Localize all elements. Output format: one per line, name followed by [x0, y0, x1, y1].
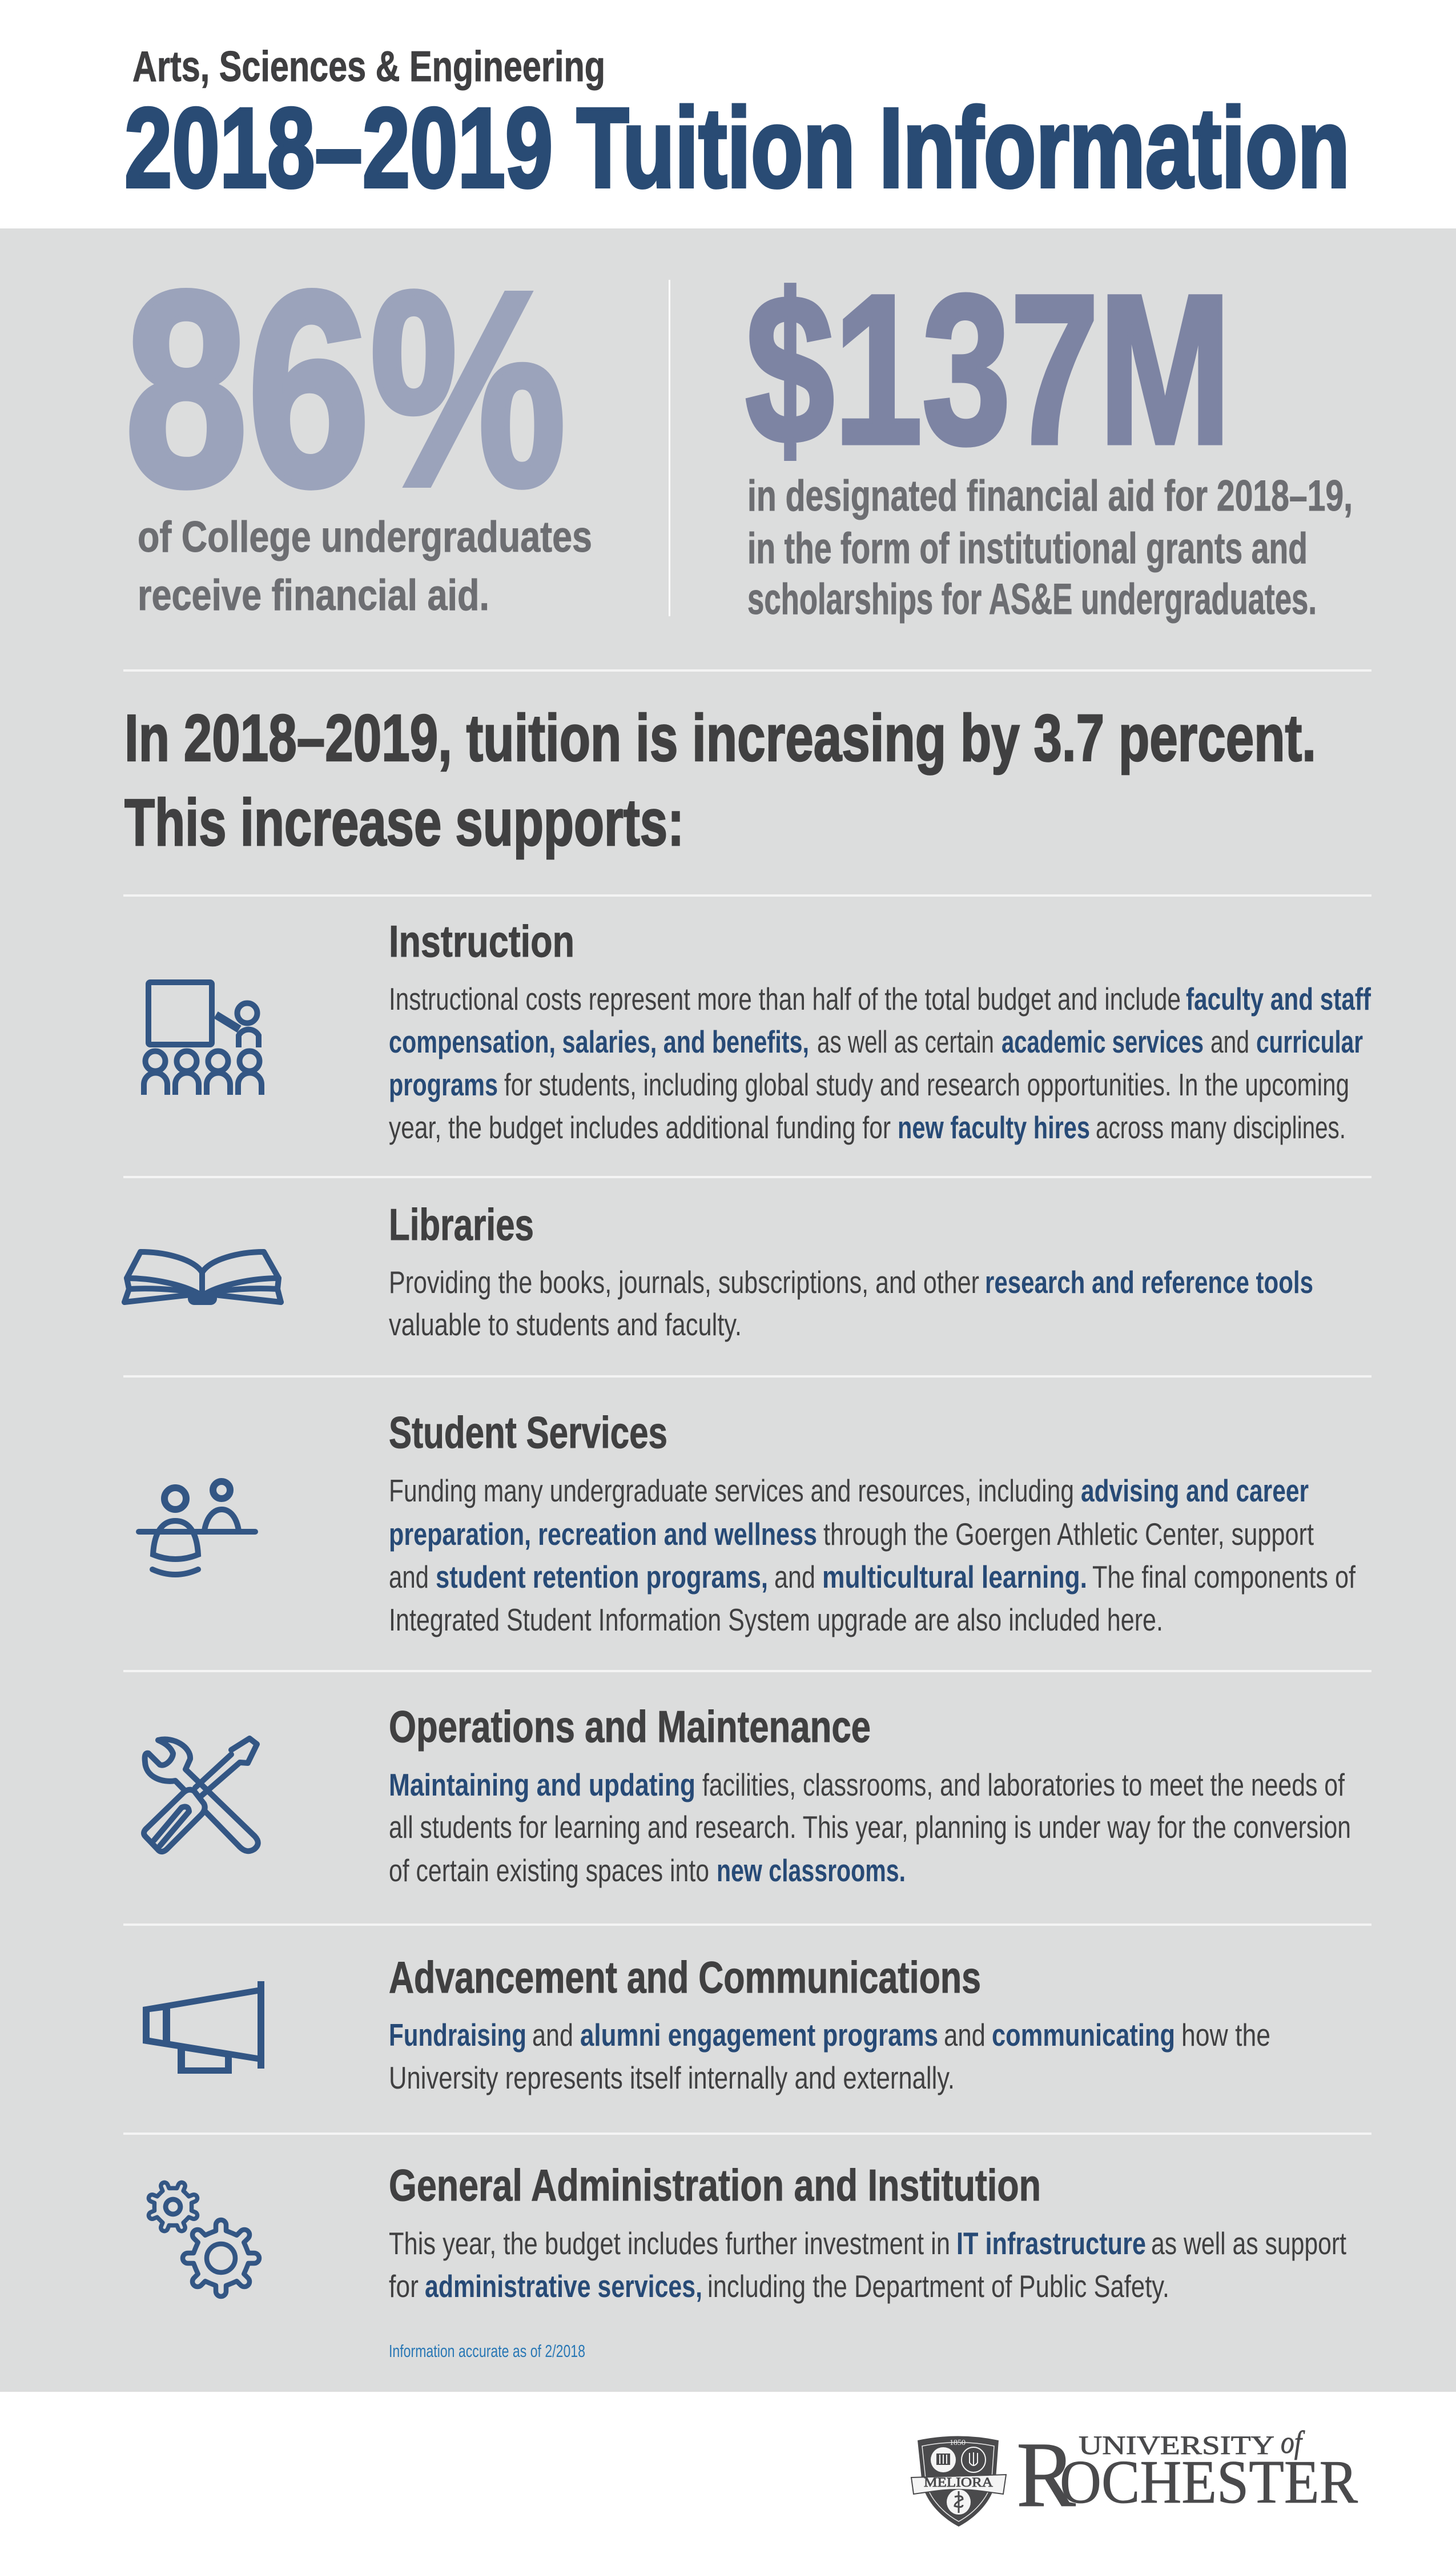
body text [389, 2226, 1346, 2304]
stat: 137 million [746, 251, 1353, 624]
body text [389, 2017, 1270, 2095]
panel: advancement and communications [143, 1952, 1270, 2095]
wordmark: of [1281, 2425, 1305, 2460]
crest: 1850 [950, 2439, 966, 2447]
stat caption: of College undergraduates [138, 513, 592, 561]
header [124, 42, 1350, 211]
body text: across many disciplines. [1096, 1110, 1346, 1145]
icon: classroom [144, 982, 262, 1095]
body text: advising and career [1081, 1473, 1309, 1508]
stat caption: receive financial aid. [138, 571, 489, 620]
body text: through the Goergen Athletic Center, support [823, 1516, 1314, 1552]
body text [389, 1473, 1356, 1637]
body text: Fundraising [389, 2017, 526, 2053]
heading: General Administration and Institution [389, 2160, 1041, 2210]
body text: as well as support [1151, 2226, 1346, 2261]
crest: MELIORA [924, 2475, 993, 2489]
icon: megaphone [143, 1981, 264, 2074]
body text: including the Department of Public Safety. [707, 2268, 1169, 2304]
body text: new classrooms. [717, 1853, 906, 1888]
body text: Funding many undergraduate services and resources, including [389, 1473, 1074, 1508]
body text: research and reference tools [985, 1264, 1313, 1300]
panel: general administration and institution [139, 2160, 1346, 2361]
wordmark [1016, 2423, 1358, 2527]
logo: University of Rochester [911, 2423, 1358, 2527]
body text: administrative services, [425, 2268, 702, 2304]
big number $137M: $137M [746, 251, 1231, 488]
body text [389, 1264, 1313, 1342]
body text: alumni engagement programs [580, 2017, 938, 2053]
heading: Instruction [389, 916, 574, 966]
body text: of certain existing spaces into [389, 1853, 709, 1888]
wordmark: OCHESTER [1060, 2448, 1358, 2516]
stat: 86 percent [125, 234, 592, 620]
panel: operations and maintenance [144, 1701, 1351, 1888]
body text: Providing the books, journals, subscriptions, and other [389, 1264, 979, 1300]
body text: communicating [992, 2017, 1175, 2053]
body text: This year, the budget includes further investment in [389, 2226, 950, 2261]
body text [389, 981, 1371, 1145]
body text: multicultural learning. [822, 1559, 1087, 1595]
body text: valuable to students and faculty. [389, 1307, 742, 1342]
wordmark: R [1016, 2423, 1076, 2527]
section heading [124, 701, 1316, 860]
panel: student services [139, 1407, 1356, 1637]
icon: wrench and screwdriver [144, 1738, 258, 1852]
heading: Advancement and Communications [389, 1952, 981, 2002]
body text: and [1210, 1024, 1249, 1059]
body text: and [944, 2017, 986, 2053]
icon: open book [124, 1252, 281, 1302]
body text: IT infrastructure [956, 2226, 1146, 2261]
body text: new faculty hires [898, 1110, 1090, 1145]
heading: Libraries [389, 1199, 534, 1250]
panel: instruction [144, 916, 1371, 1145]
body text: how the [1181, 2017, 1270, 2053]
crest [911, 2436, 1006, 2527]
body text: compensation, salaries, and benefits, [389, 1024, 809, 1059]
subtitle: Arts, Sciences & Engineering [132, 42, 605, 90]
body text: programs [389, 1067, 498, 1102]
body text: and [774, 1559, 815, 1595]
footnote: Information accurate as of 2/2018 [389, 2341, 585, 2361]
icon: gears [139, 2173, 259, 2296]
wordmark: UNIVERSITY [1079, 2431, 1274, 2460]
body text: faculty and staff [1186, 981, 1371, 1017]
body text [389, 1767, 1351, 1888]
body text: Integrated Student Information System upgrade are also included here. [389, 1602, 1163, 1637]
body text: The final components of [1092, 1559, 1356, 1595]
body text: and [389, 1559, 429, 1595]
body text: year, the budget includes additional funding for [389, 1110, 891, 1145]
body text: Maintaining and updating [389, 1767, 695, 1802]
panel: libraries [124, 1199, 1313, 1342]
big number 86%: 86% [125, 234, 566, 543]
body text: and [532, 2017, 573, 2053]
body text: University represents itself internally and externally. [389, 2060, 955, 2095]
body text: for [389, 2268, 419, 2304]
body text: student retention programs, [436, 1559, 768, 1595]
stat caption [747, 472, 1353, 624]
body text: curricular [1256, 1024, 1363, 1059]
icon: people at table [139, 1481, 255, 1575]
body text: as well as certain [817, 1024, 994, 1059]
body text: preparation, recreation and wellness [389, 1516, 817, 1552]
body text: Instructional costs represent more than half of the total budget and include [389, 981, 1181, 1017]
heading: Student Services [389, 1407, 667, 1457]
body text: academic services [1001, 1024, 1204, 1059]
stat caption [138, 513, 592, 620]
heading: Operations and Maintenance [389, 1701, 871, 1752]
section heading: This increase supports: [124, 785, 684, 860]
